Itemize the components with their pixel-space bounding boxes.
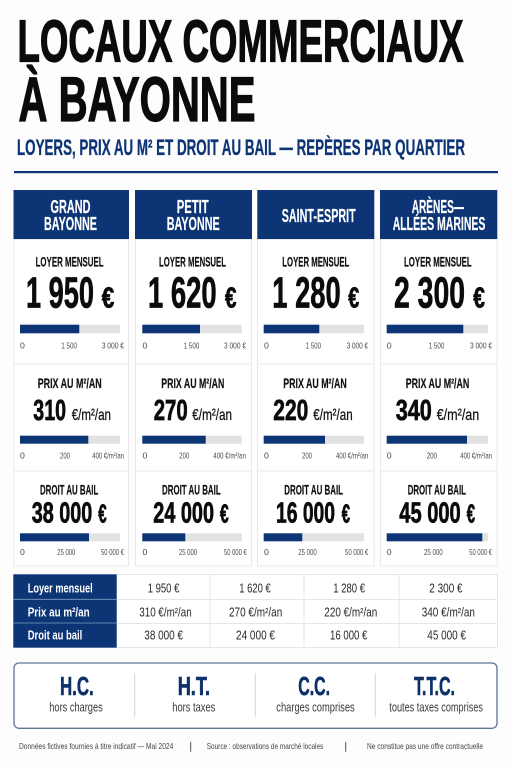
table row: loyer mensuel: 2 300 € [429, 581, 463, 595]
card: droit au bail Petit Bayonne: 24 000 [153, 498, 214, 530]
glossary: H.C.: hors charges [49, 700, 103, 715]
glossary: C.C. [276, 673, 355, 715]
card: prix au m2 Grand Bayonne: 0 [20, 450, 25, 460]
glossary: C.C.: C.C. [298, 673, 330, 701]
card: prix au m2 Petit Bayonne: PRIX AU M²/AN [161, 375, 224, 391]
card: prix au m2 Grand Bayonne: 400 €/m²/an [92, 450, 124, 460]
table row: prix au m2 [28, 604, 475, 619]
card: loyer mensuel Grand Bayonne: LOYER MENSUEL [36, 254, 104, 270]
card: prix au m2 Saint-Esprit: 220 [273, 395, 308, 427]
card: loyer mensuel Grand Bayonne: 0 [20, 341, 25, 351]
card: droit au bail Grand Bayonne: 38 000 [32, 498, 92, 530]
card: prix au m2 Petit Bayonne: 270 [154, 395, 188, 427]
card: loyer mensuel Arènes [380, 240, 497, 364]
table row: droit au bail: 38 000 € [144, 629, 183, 643]
card: loyer mensuel Saint-Esprit: LOYER MENSUEL [282, 254, 350, 270]
card: loyer mensuel Petit Bayonne: 1 500 [184, 341, 199, 351]
card: prix au m2 Saint-Esprit: PRIX AU M²/AN [283, 375, 347, 391]
card: droit au bail Petit Bayonne: 50 000 € [224, 547, 247, 557]
table row: droit au bail [28, 628, 466, 643]
card: loyer mensuel Saint-Esprit: 1 500 [306, 341, 321, 351]
glossary: H.T. [172, 673, 216, 715]
card: droit au bail Petit Bayonne [136, 471, 252, 566]
column header: Arènes-Allées Marines: ARÈNES— [412, 196, 464, 217]
card: droit au bail Grand Bayonne: 50 000 € [101, 547, 124, 557]
card: prix au m2 Petit Bayonne [136, 364, 252, 471]
card: droit au bail Arènes: € [467, 501, 475, 529]
glossary: H.T.: H.T. [178, 673, 210, 701]
glossary: H.T.: hors taxes [172, 700, 216, 715]
card: prix au m2 Grand Bayonne: €/m²/an [72, 407, 111, 424]
card: loyer mensuel Petit Bayonne: 0 [142, 341, 148, 351]
card: prix au m2 Arènes: 340 [396, 395, 432, 427]
glossary: T.T.C.: T.T.C. [414, 673, 455, 701]
summary table [13, 574, 498, 648]
column header: Petit Bayonne [135, 190, 252, 239]
card: loyer mensuel Grand Bayonne: 1 950 [26, 270, 94, 318]
card: prix au m2 Grand Bayonne: 310 [33, 395, 66, 427]
title [18, 8, 464, 135]
footer: Source : observations de marché locales [207, 741, 323, 751]
card: loyer mensuel Petit Bayonne [136, 240, 252, 364]
card: droit au bail Saint-Esprit: 25 000 [298, 547, 317, 557]
card: droit au bail Petit Bayonne: € [220, 501, 229, 529]
card: droit au bail Saint-Esprit [258, 471, 374, 566]
card: prix au m2 Arènes: 0 [387, 450, 392, 460]
card: prix au m2 Petit Bayonne: €/m²/an [192, 407, 232, 424]
card: droit au bail Saint-Esprit: € [342, 501, 350, 529]
card: loyer mensuel Grand Bayonne: € [102, 283, 114, 315]
card: droit au bail Petit Bayonne: 0 [142, 547, 148, 557]
glossary: C.C.: charges comprises [276, 700, 355, 715]
card: droit au bail Arènes: 25 000 [424, 547, 443, 557]
card: prix au m2 Petit Bayonne: 200 [179, 450, 189, 460]
card: loyer mensuel Petit Bayonne: 3 000 € [224, 341, 246, 351]
card: prix au m2 Saint-Esprit: €/m²/an [313, 407, 353, 424]
card: droit au bail Saint-Esprit: 50 000 € [345, 547, 368, 557]
card: loyer mensuel Saint-Esprit: 3 000 € [347, 341, 368, 351]
panel: Grand Bayonne [14, 190, 129, 566]
card: loyer mensuel Petit Bayonne: LOYER MENSUEL [159, 254, 226, 270]
card: prix au m2 Saint-Esprit: 200 [302, 450, 312, 460]
card: loyer mensuel Grand Bayonne [14, 240, 128, 364]
table row: droit au bail: Droit au bail [28, 628, 82, 643]
table row: loyer mensuel: Loyer mensuel [28, 580, 93, 595]
card: droit au bail Grand Bayonne: DROIT AU BAIL [40, 481, 99, 497]
card: loyer mensuel Saint-Esprit: 0 [264, 341, 269, 351]
table row: droit au bail: 45 000 € [427, 629, 466, 643]
card: loyer mensuel Grand Bayonne: 3 000 € [102, 341, 124, 351]
card: prix au m2 Arènes: 400 €/m²/an [460, 450, 492, 460]
glossary: H.C.: H.C. [60, 673, 94, 701]
card: droit au bail Saint-Esprit: 0 [264, 547, 269, 557]
card: prix au m2 Arènes: €/m²/an [437, 407, 479, 424]
card: droit au bail Arènes: 45 000 [399, 498, 461, 530]
card: loyer mensuel Arènes: € [473, 283, 485, 315]
table row: loyer mensuel: 1 280 € [333, 581, 365, 595]
column header: Saint-Esprit: SAINT-ESPRIT [282, 206, 356, 226]
card: prix au m2 Petit Bayonne: 400 €/m²/an [213, 450, 246, 460]
table row: loyer mensuel: 1 950 € [148, 581, 179, 595]
card: prix au m2 Arènes [380, 364, 497, 471]
card: prix au m2 Saint-Esprit [258, 364, 374, 471]
glossary: T.T.C. [389, 673, 483, 715]
card: droit au bail Saint-Esprit: 16 000 [276, 498, 335, 530]
card: prix au m2 Grand Bayonne: 200 [60, 450, 70, 460]
card: prix au m2 Grand Bayonne [14, 364, 128, 471]
table row: loyer mensuel: 1 620 € [239, 581, 271, 595]
card: droit au bail Petit Bayonne: DROIT AU BAIL [162, 481, 221, 497]
card: prix au m2 Arènes: 200 [427, 450, 437, 460]
card: droit au bail Grand Bayonne: 0 [20, 547, 25, 557]
card: prix au m2 Saint-Esprit: 400 €/m²/an [336, 450, 368, 460]
card: droit au bail Arènes: 0 [387, 547, 392, 557]
card: prix au m2 Saint-Esprit: 0 [264, 450, 269, 460]
card: droit au bail Arènes [380, 471, 497, 566]
card: droit au bail Saint-Esprit: DROIT AU BAIL [284, 481, 343, 497]
table row: prix au m2: 270 €/m²/an [229, 605, 282, 619]
glossary: H.C. [49, 673, 103, 715]
footer [19, 741, 483, 752]
card: loyer mensuel Saint-Esprit: 1 280 [272, 270, 341, 318]
table row: prix au m2: 220 €/m²/an [324, 605, 377, 619]
table row: prix au m2: 310 €/m²/an [139, 605, 192, 619]
column header: Grand Bayonne: GRAND [50, 197, 90, 217]
card: loyer mensuel Grand Bayonne: 1 500 [61, 341, 77, 351]
table row: prix au m2: 340 €/m²/an [422, 605, 475, 619]
panel: Saint-Esprit [257, 190, 374, 566]
card: loyer mensuel Arènes: 2 300 [394, 270, 465, 318]
card: droit au bail Grand Bayonne: 25 000 [57, 547, 75, 557]
column header: Saint-Esprit [257, 190, 374, 239]
card: prix au m2 Petit Bayonne: 0 [142, 450, 148, 460]
column header: Grand Bayonne [14, 190, 129, 239]
table row: prix au m2: Prix au m²/an [28, 604, 90, 619]
card: prix au m2 Grand Bayonne: PRIX AU M²/AN [38, 375, 102, 391]
glossary panel [14, 663, 497, 728]
column header: Grand Bayonne: BAYONNE [44, 214, 97, 234]
table row: droit au bail: 24 000 € [236, 629, 275, 643]
card: loyer mensuel Arènes: 1 500 [429, 341, 444, 351]
card: droit au bail Arènes: DROIT AU BAIL [408, 481, 466, 497]
card: loyer mensuel Arènes: 3 000 € [470, 341, 492, 351]
card: droit au bail Arènes: 50 000 € [469, 547, 492, 557]
card: loyer mensuel Petit Bayonne: 1 620 [148, 270, 217, 318]
table row: loyer mensuel [28, 580, 463, 595]
card: loyer mensuel Saint-Esprit: € [348, 283, 359, 315]
card: droit au bail Grand Bayonne [14, 471, 128, 566]
title: À BAYONNE [18, 65, 256, 135]
column header: Petit Bayonne: PETIT [177, 197, 209, 217]
card: loyer mensuel Petit Bayonne: € [225, 283, 236, 315]
card: prix au m2 Arènes: PRIX AU M²/AN [406, 375, 469, 391]
column header: Petit Bayonne: BAYONNE [167, 214, 220, 234]
panel: Petit Bayonne [135, 190, 252, 566]
card: loyer mensuel Arènes: 0 [387, 341, 392, 351]
card: droit au bail Petit Bayonne: 25 000 [179, 547, 197, 557]
column header: Arènes-Allées Marines [380, 190, 497, 239]
panel: Arènes-Allées Marines [380, 190, 497, 566]
card: loyer mensuel Saint-Esprit [258, 240, 374, 364]
card: droit au bail Grand Bayonne: € [98, 501, 107, 529]
table row: droit au bail: 16 000 € [330, 629, 367, 643]
footer: Données fictives fournies à titre indicatif — Mai 2024 [19, 741, 174, 751]
